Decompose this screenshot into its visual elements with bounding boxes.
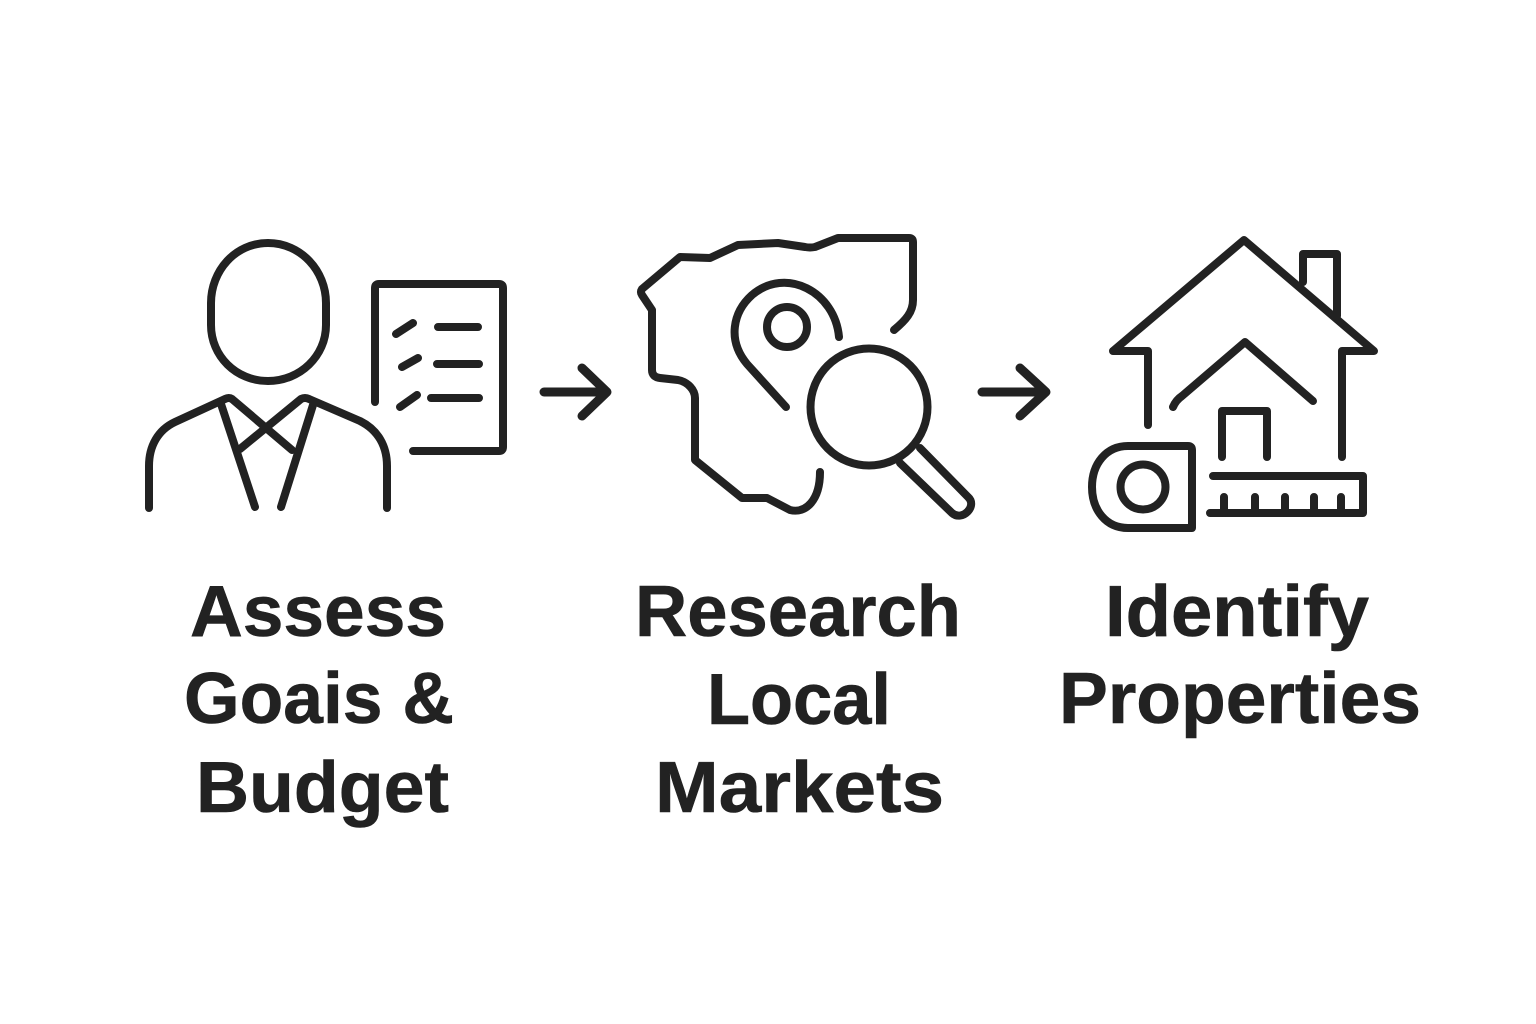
arrow: step one to two <box>544 368 607 416</box>
label: identify properties: Properties <box>1059 659 1421 739</box>
label: assess goals and budget: Budget <box>196 748 449 828</box>
label: assess goals and budget: Assess <box>190 572 446 652</box>
label: research local markets: Local <box>707 660 891 740</box>
arrow: step two to three <box>982 368 1046 416</box>
icon: map with pin and magnifier <box>641 238 971 516</box>
icon: house with tape measure <box>1092 240 1374 528</box>
label: assess goals and budget: Goais & <box>184 659 454 739</box>
label: research local markets: Research <box>635 572 961 652</box>
icon: person with document <box>149 243 503 508</box>
label: identify properties: Identify <box>1105 572 1369 652</box>
label: research local markets <box>635 572 961 828</box>
label: assess goals and budget <box>184 572 454 828</box>
label: identify properties <box>1059 572 1421 739</box>
label: research local markets: Markets <box>655 748 944 828</box>
